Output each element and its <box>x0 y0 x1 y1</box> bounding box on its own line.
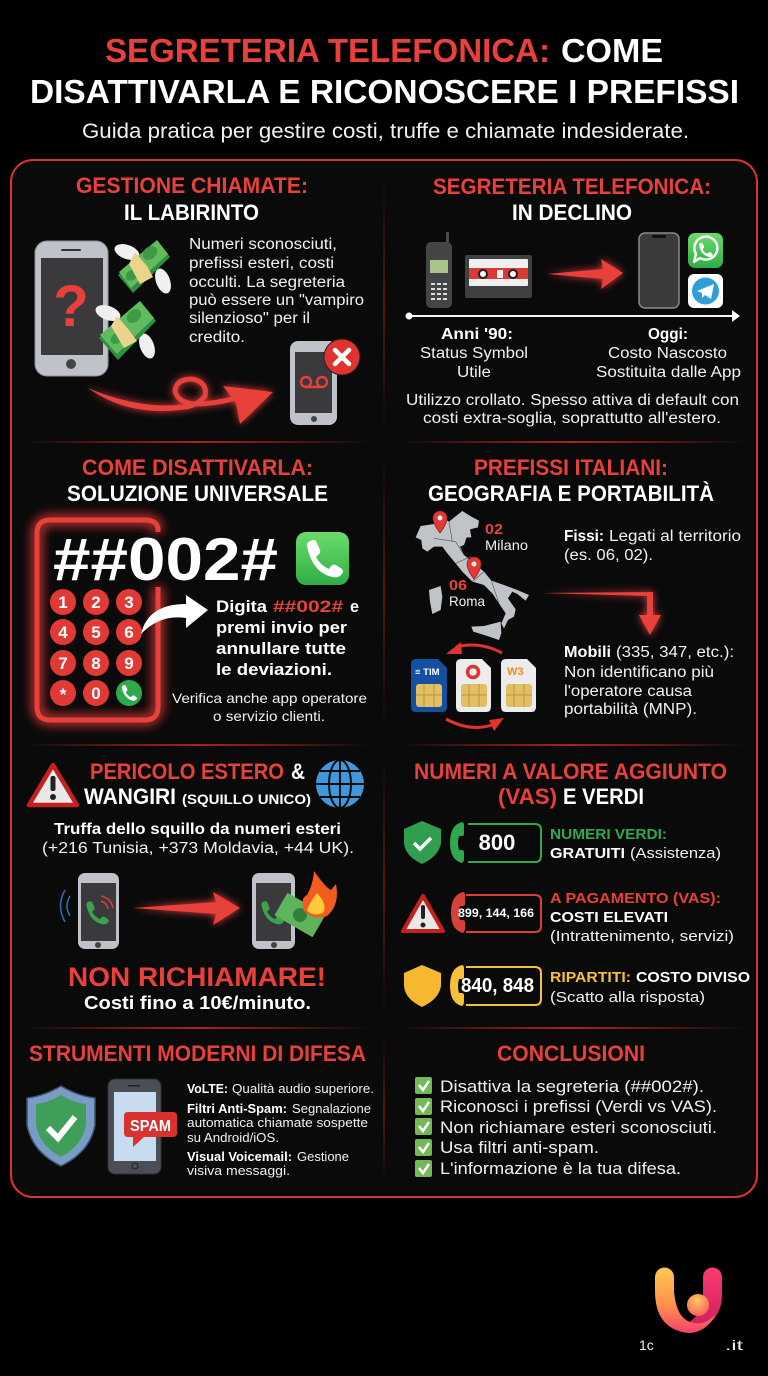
text block: può essere un "vampiro <box>189 292 364 309</box>
text block: VoLTE: <box>187 1082 228 1096</box>
title: SEGRETERIA TELEFONICA: <box>105 33 550 70</box>
icon: phone with question mark <box>35 241 108 376</box>
icon: telegram <box>688 274 723 308</box>
note text <box>172 690 367 724</box>
label: anni 90 <box>420 326 528 381</box>
text block: automatica chiamate sospette <box>187 1116 368 1130</box>
panel: strumenti moderni <box>27 1041 374 1178</box>
keypad buttons: 8 <box>91 654 101 673</box>
text block: Gestione <box>297 1150 349 1164</box>
icon: shield <box>27 1086 95 1166</box>
heading: (SQUILLO UNICO) <box>182 791 311 807</box>
row: numeri verdi <box>404 821 721 864</box>
number box: vas: 899, 144, 166 <box>458 906 534 920</box>
row: a pagamento <box>403 890 734 945</box>
keypad buttons: 1 <box>58 593 68 612</box>
logo <box>639 1268 743 1353</box>
label: milano: 02 <box>485 521 503 538</box>
icon: green phone <box>296 532 349 585</box>
arrow: sim swap top <box>446 642 502 654</box>
heading: & <box>291 759 305 784</box>
text: fissi: (es. 06, 02). <box>564 547 653 564</box>
keypad buttons <box>50 589 142 706</box>
label: oggi: Oggi: <box>648 326 688 343</box>
label: anni 90: Utile <box>457 364 491 381</box>
text: fissi <box>564 528 741 564</box>
instruction text <box>216 597 359 679</box>
text block: Numeri sconosciuti, <box>189 236 337 253</box>
instruction text: premi invio per <box>216 618 347 637</box>
icon: phone with voicemail cancelled <box>290 339 360 425</box>
panel: numeri a valore aggiunto <box>403 759 750 1007</box>
label: roma: Roma <box>449 593 485 609</box>
text block <box>187 1082 374 1178</box>
text: mobili <box>564 644 734 718</box>
keypad frame <box>37 520 158 720</box>
text: costi: Costi fino a 10€/minuto. <box>84 993 311 1013</box>
keypad buttons: 2 <box>91 593 101 612</box>
keypad buttons: 6 <box>124 623 134 642</box>
label: oggi: Sostituita dalle App <box>596 364 741 381</box>
panel: gestione chiamate <box>35 173 364 425</box>
text block: visiva messaggi. <box>187 1164 290 1178</box>
heading: SEGRETERIA TELEFONICA: <box>433 174 711 199</box>
text: mobili: Non identificano più <box>564 664 714 681</box>
heading: PERICOLO ESTERO <box>90 759 284 784</box>
icon: warning triangle <box>403 896 443 931</box>
text: (Scatto alla risposta) <box>550 989 705 1006</box>
text: fissi: Legati al territorio <box>609 528 741 545</box>
icon: warning triangle <box>29 765 77 805</box>
label: milano: Milano <box>485 537 528 553</box>
heading <box>67 455 328 506</box>
icon: modern smartphone <box>639 233 679 308</box>
text block: Qualità audio superiore. <box>232 1082 374 1096</box>
arrow: sim swap bottom <box>446 718 504 731</box>
icon: sim tim <box>411 659 447 712</box>
keypad buttons: 0 <box>91 684 101 703</box>
arrow: white curved <box>141 595 208 634</box>
label: roma <box>449 577 485 609</box>
checklist: Disattiva la segreteria (##002#). <box>440 1078 704 1096</box>
heading <box>433 174 711 225</box>
text: COSTI ELEVATI <box>550 909 668 926</box>
arrow: past to present <box>547 259 623 289</box>
text block: costi extra-soglia, soprattutto all'estero. <box>423 410 721 427</box>
label: roma: 06 <box>449 577 467 594</box>
heading <box>414 759 727 809</box>
heading: GESTIONE CHIAMATE: <box>76 173 308 198</box>
icon: flying money top <box>112 240 174 296</box>
text block <box>189 236 364 346</box>
text <box>550 969 750 1006</box>
text block: prefissi esteri, costi <box>189 255 334 272</box>
icon: phone with spam <box>108 1079 177 1174</box>
text: mobili: l'operatore causa <box>564 683 692 700</box>
heading: GEOGRAFIA E PORTABILITÀ <box>428 481 714 506</box>
heading: IL LABIRINTO <box>124 200 259 225</box>
instruction text: e <box>350 597 359 616</box>
logo: .it <box>725 1337 743 1353</box>
pin: milano <box>433 511 447 533</box>
timeline <box>406 310 740 322</box>
text block: Utilizzo crollato. Spesso attiva di default con <box>406 392 739 409</box>
row: ripartiti <box>404 965 750 1007</box>
panel: segreteria in declino <box>406 174 741 427</box>
subtitle: Guida pratica per gestire costi, truffe e chiamate indesiderate. <box>82 119 689 143</box>
text: (Intrattenimento, servizi) <box>550 928 734 945</box>
icon: phone with burning money <box>252 871 337 949</box>
icon: phone with question mark: ? <box>53 274 89 339</box>
heading <box>428 455 714 506</box>
text: mobili: (335, 347, etc.): <box>616 644 734 661</box>
icon: yellow shield <box>404 965 441 1007</box>
keypad buttons: 5 <box>91 623 101 642</box>
number box: 800 <box>450 822 541 863</box>
label: milano <box>485 521 528 553</box>
label: oggi: Costo Nascosto <box>608 345 727 362</box>
icon: ringing phone <box>60 873 119 949</box>
keypad buttons: 7 <box>58 654 68 673</box>
number box: 800: 800 <box>479 830 515 855</box>
heading: IN DECLINO <box>512 200 632 225</box>
icon: whatsapp <box>688 233 723 268</box>
instruction text: ##002# <box>273 597 344 616</box>
text block: occulti. La segreteria <box>189 274 345 291</box>
text: mobili: portabilità (MNP). <box>564 701 697 718</box>
icon: sim vodafone <box>456 659 491 712</box>
text <box>550 890 734 945</box>
text: mobili: Mobili <box>564 644 611 661</box>
heading: STRUMENTI MODERNI DI DIFESA <box>29 1041 366 1066</box>
text block <box>406 392 739 427</box>
heading <box>76 173 308 225</box>
heading: COME DISATTIVARLA: <box>82 455 313 480</box>
checklist: Non richiamare esteri sconosciuti. <box>440 1119 717 1137</box>
icon: sim tim: ≡ TIM <box>415 667 440 678</box>
icon: sim wind3 <box>501 659 536 712</box>
keypad buttons: 3 <box>124 593 134 612</box>
heading: E VERDI <box>563 784 644 809</box>
text block: Segnalazione <box>292 1102 371 1116</box>
heading <box>84 759 311 809</box>
text: (Assistenza) <box>630 845 721 862</box>
text block: Visual Voicemail: <box>187 1150 292 1164</box>
arrow: looping red <box>88 379 273 424</box>
number box: ripartiti: 840, 848 <box>461 975 534 997</box>
text block <box>42 821 354 857</box>
main panel frame <box>11 160 757 1197</box>
text: GRATUITI <box>550 845 625 862</box>
text block: Truffa dello squillo da numeri esteri <box>54 821 341 838</box>
title <box>30 33 739 111</box>
title: COME <box>561 33 663 70</box>
note text: o servizio clienti. <box>213 708 325 724</box>
callout: non richiamare: NON RICHIAMARE! <box>68 962 326 992</box>
panel: conclusioni <box>415 1041 717 1178</box>
icon: flying money bottom <box>93 301 158 361</box>
label: anni 90: Anni '90: <box>441 326 513 343</box>
heading: PREFISSI ITALIANI: <box>474 455 668 480</box>
instruction text: Digita <box>216 597 268 616</box>
arrow: elbow <box>541 592 661 635</box>
icon: green shield <box>404 821 441 864</box>
text: NUMERI VERDI: <box>550 826 667 843</box>
text: A PAGAMENTO (VAS): <box>550 890 721 907</box>
keypad buttons: 4 <box>58 623 68 642</box>
text: COSTO DIVISO <box>636 969 750 986</box>
number box: ripartiti <box>450 965 541 1006</box>
heading: SOLUZIONE UNIVERSALE <box>67 481 328 506</box>
panel: come disattivarla <box>37 455 367 724</box>
text block: su Android/iOS. <box>187 1131 279 1145</box>
arrow: call back <box>133 892 240 925</box>
map: italy <box>416 511 529 640</box>
keypad buttons: 9 <box>124 654 134 673</box>
icon: old mobile phone <box>426 232 452 308</box>
icon: globe <box>316 760 364 808</box>
text: fissi: Fissi: <box>564 528 604 545</box>
checklist: Usa filtri anti-spam. <box>440 1139 599 1157</box>
keypad buttons: * <box>60 685 67 704</box>
heading: NUMERI A VALORE AGGIUNTO <box>414 759 727 784</box>
text block: (+216 Tunisia, +373 Moldavia, +44 UK). <box>42 840 354 857</box>
checklist: Riconosci i prefissi (Verdi vs VAS). <box>440 1098 717 1116</box>
number box: vas <box>451 892 541 933</box>
note text: Verifica anche app operatore <box>172 690 367 706</box>
heading: WANGIRI <box>84 784 176 809</box>
icon: phone with spam: SPAM <box>130 1118 171 1135</box>
instruction text: le deviazioni. <box>216 660 332 679</box>
heading: CONCLUSIONI <box>497 1041 645 1066</box>
panel: pericolo estero <box>29 759 364 1013</box>
checklist <box>415 1077 717 1178</box>
title: DISATTIVARLA E RICONOSCERE I PREFISSI <box>30 74 739 111</box>
icon: sim wind3: W3 <box>507 666 524 678</box>
code: ##002#: ##002# <box>53 526 278 593</box>
icon: cassette <box>465 255 532 298</box>
logo: 1c <box>639 1337 654 1353</box>
pin: roma <box>467 557 481 579</box>
text: RIPARTITI: <box>550 969 631 986</box>
heading: (VAS) <box>498 784 557 809</box>
panel: prefissi italiani <box>411 455 741 731</box>
text block: silenzioso" per il <box>189 310 310 327</box>
text block: credito. <box>189 329 245 346</box>
text block: Filtri Anti-Spam: <box>187 1102 287 1116</box>
label: oggi <box>596 326 741 381</box>
checklist: L'informazione è la tua difesa. <box>440 1160 681 1178</box>
label: anni 90: Status Symbol <box>420 345 528 362</box>
instruction text: annullare tutte <box>216 639 346 658</box>
text <box>550 826 721 862</box>
